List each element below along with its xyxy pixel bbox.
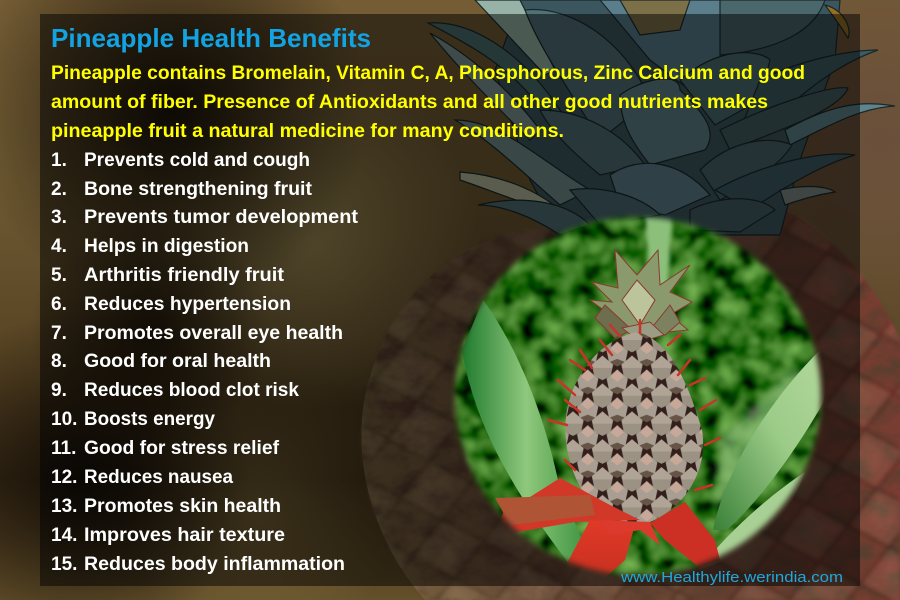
numbered benefits list: Improves hair texture — [84, 525, 285, 546]
lower right green leaf — [698, 472, 805, 570]
numbered benefits list: Helps in digestion — [84, 236, 249, 257]
numbered benefits list: 12. — [51, 467, 77, 488]
pale stalk behind crown — [645, 215, 672, 290]
numbered benefits list — [51, 150, 359, 575]
numbered benefits list: 3. — [51, 207, 67, 228]
intro paragraph — [51, 63, 805, 142]
numbered benefits list: Good for stress relief — [84, 438, 280, 459]
numbered benefits list: 13. — [51, 496, 77, 517]
small pineapple crown — [590, 250, 692, 342]
numbered benefits list: 11. — [51, 438, 76, 459]
numbered benefits list: Promotes overall eye health — [84, 323, 343, 344]
numbered benefits list: Prevents cold and cough — [84, 150, 310, 171]
numbered benefits list: Reduces hypertension — [84, 294, 291, 315]
intro paragraph: pineapple fruit a natural medicine for many conditions. — [51, 121, 564, 142]
numbered benefits list: Prevents tumor development — [84, 207, 359, 228]
numbered benefits list: Reduces nausea — [84, 467, 233, 488]
red bracts — [495, 478, 720, 578]
intro paragraph: amount of fiber. Presence of Antioxidants and all other good nutrients makes — [51, 92, 768, 113]
green foliage backdrop — [451, 214, 824, 579]
numbered benefits list: Good for oral health — [84, 351, 271, 372]
numbered benefits list: 9. — [51, 380, 67, 401]
numbered benefits list: 4. — [51, 236, 67, 257]
numbered benefits list: 15. — [51, 554, 77, 575]
large pineapple crown leaves — [428, 0, 895, 235]
numbered benefits list: Promotes skin health — [84, 496, 281, 517]
numbered benefits list: 2. — [51, 179, 67, 200]
numbered benefits list: 5. — [51, 265, 67, 286]
right green leaf — [713, 350, 825, 530]
numbered benefits list: 10. — [51, 409, 77, 430]
numbered benefits list: 8. — [51, 351, 67, 372]
numbered benefits list: Reduces blood clot risk — [84, 380, 299, 401]
numbered benefits list: Arthritis friendly fruit — [84, 265, 285, 286]
pale blurred background leaves — [715, 370, 815, 510]
numbered benefits list: 6. — [51, 294, 67, 315]
left green leaf — [462, 300, 590, 565]
lens circle showing small pineapple plant — [451, 214, 825, 579]
numbered benefits list: Boosts energy — [84, 409, 215, 430]
numbered benefits list: 14. — [51, 525, 77, 546]
numbered benefits list: 1. — [51, 150, 67, 171]
small pineapple body — [548, 320, 720, 523]
intro paragraph: Pineapple contains Bromelain, Vitamin C, A, Phosphorous, Zinc Calcium and good — [51, 63, 805, 84]
numbered benefits list: Reduces body inflammation — [84, 554, 345, 575]
large pineapple fruit — [361, 205, 900, 600]
numbered benefits list: Bone strengthening fruit — [84, 179, 313, 200]
title: Pineapple Health Benefits — [51, 23, 371, 53]
website footer: www.Healthylife.werindia.com — [620, 569, 843, 586]
numbered benefits list: 7. — [51, 323, 67, 344]
